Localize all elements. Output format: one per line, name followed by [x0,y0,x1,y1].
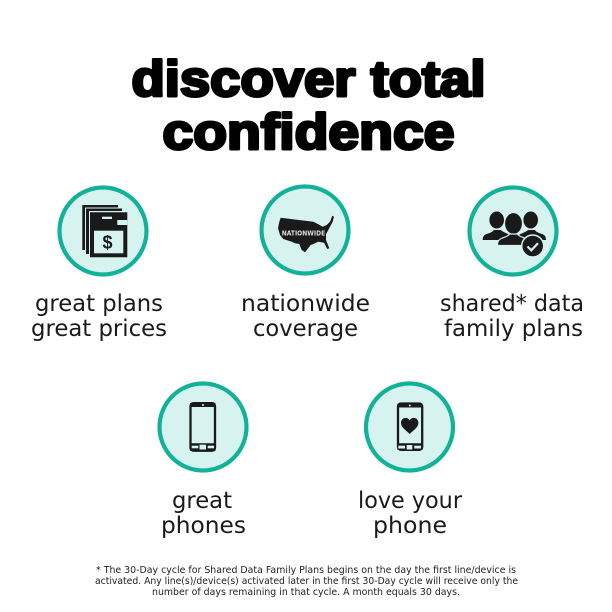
label: phones [161,513,246,539]
label: great [172,488,232,514]
label: great plans [35,291,163,317]
icon: price cards [60,188,146,274]
label: great prices [31,316,167,342]
icon: smartphone [160,384,246,470]
panel: nationwide coverage [241,186,370,342]
icon: USA map [262,186,348,274]
panel: great plans great prices [31,188,167,342]
panel: shared data family plans [440,188,584,342]
footnote [95,565,518,598]
label: phone [373,513,447,539]
label: nationwide [241,291,370,317]
title [132,51,486,160]
panel: love your phone [358,384,463,539]
label: love your [358,488,463,514]
label [31,291,167,342]
icon: smartphone with heart [366,384,453,470]
label [358,488,463,539]
icon: price cards: $ [102,232,113,252]
footnote: activated. Any line(s)/device(s) activated later in the first 30-Day cycle will receive only the [95,576,518,587]
label [241,291,370,342]
label: family plans [444,316,583,342]
icon: USA map: NATIONWIDE [282,228,325,238]
label: coverage [253,316,358,342]
label [161,488,246,539]
footnote: number of days remaining in that cycle. A month equals 30 days. [152,587,460,598]
title: confidence [162,104,454,160]
icon: group with check mark [470,188,556,274]
footnote: * The 30-Day cycle for Shared Data Family Plans begins on the day the first line/device is [96,565,516,576]
label: shared* data [440,291,584,317]
panel: great phones [160,384,246,539]
title: discover total [132,51,486,107]
label [440,291,584,342]
